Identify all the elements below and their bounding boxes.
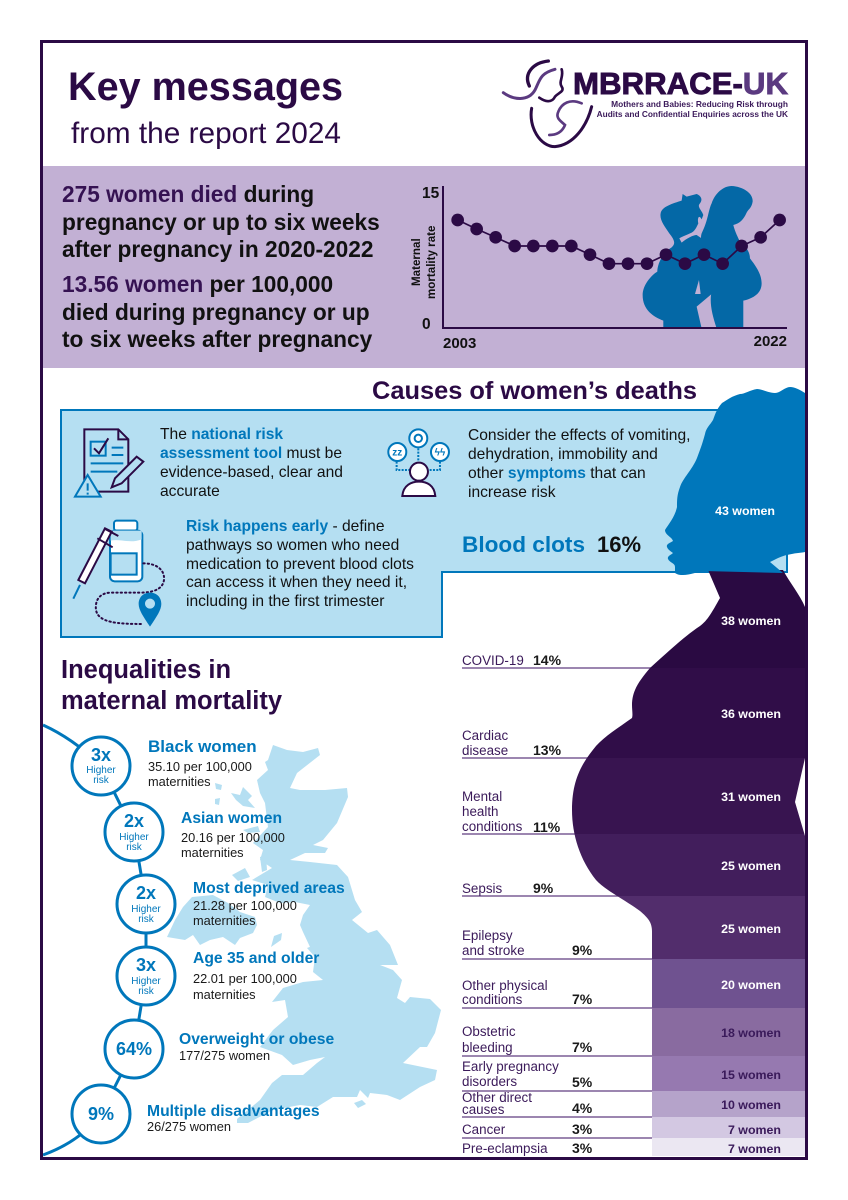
- text: national risk assessment tool: [160, 426, 343, 500]
- item: Black women: 35.10 per 100,000: [148, 759, 252, 774]
- connector: curved line through risk circles: [43, 725, 146, 1155]
- list: causes of death percentages: 9%: [572, 942, 593, 958]
- text: mortality rate: [62, 271, 373, 352]
- text: national risk assessment tool: accurate: [160, 483, 220, 500]
- text: consider the effects: increase risk: [468, 484, 556, 501]
- item: Age 35 and older: risk: [138, 986, 155, 997]
- text: risk happens early: [186, 518, 414, 610]
- line chart: maternal mortality rate: 0: [422, 316, 431, 333]
- head: blood clots segment: [665, 387, 805, 575]
- item: Overweight or obese: 64%: [116, 1039, 152, 1059]
- icon: logo mother and baby profile: [503, 61, 592, 147]
- item: Age 35 and older: Higher: [131, 976, 161, 987]
- chart: silhouette of pregnant woman divided by cause: 36 women: [721, 707, 781, 721]
- icon: person with symptoms: ϟϟ: [435, 448, 446, 459]
- icon: person with symptoms: [388, 429, 449, 496]
- item: Most deprived areas: 21.28 per 100,000: [193, 898, 297, 913]
- chart: silhouette of pregnant woman divided by cause: 7 women: [728, 1142, 781, 1156]
- list: causes of death percentages: health: [462, 804, 498, 819]
- item: Most deprived areas: Higher: [131, 904, 161, 915]
- list: causes of death percentages: COVID-19: [462, 653, 524, 668]
- list: causes of death percentages: 9%: [533, 880, 554, 896]
- list: causes of death percentages: 14%: [533, 652, 562, 668]
- figure lines: cause list rules: [462, 668, 660, 1138]
- list: causes of death percentages: Epilepsy: [462, 928, 513, 943]
- item: Asian women: Higher: [119, 832, 149, 843]
- text: blood clots percentage: [462, 532, 641, 557]
- list: causes of death percentages: 4%: [572, 1100, 593, 1116]
- text: women died: [62, 181, 380, 262]
- text: consider the effects: other symptoms that can: [468, 465, 646, 482]
- list: causes of death percentages: 3%: [572, 1140, 593, 1156]
- item: Asian women: [105, 803, 285, 861]
- panel: headline statistics band: [43, 166, 805, 368]
- text: consider the effects: [468, 427, 690, 501]
- item: Black women: Black women: [148, 737, 257, 756]
- text: national risk assessment tool: The national risk: [160, 426, 283, 443]
- chart: silhouette of pregnant woman divided by cause: [560, 387, 810, 1156]
- text: risk happens early: pathways so women who need: [186, 537, 399, 554]
- item: Age 35 and older: 3x: [136, 955, 156, 975]
- item: Asian women: maternities: [181, 845, 244, 860]
- chart: silhouette of pregnant woman divided by cause: 38 women: [721, 614, 781, 628]
- list: causes of death percentages: Other physical: [462, 978, 548, 993]
- item: Most deprived areas: risk: [138, 914, 155, 925]
- item: Overweight or obese: 177/275 women: [179, 1048, 270, 1063]
- icon: person with symptoms: zz: [392, 448, 402, 459]
- list: causes of death percentages: 13%: [533, 742, 562, 758]
- list: causes of death percentages: disorders: [462, 1074, 517, 1089]
- text: risk happens early: can access it when they need it,: [186, 574, 407, 591]
- panel: blood clots box: [61, 410, 787, 637]
- chart: silhouette of pregnant woman divided by cause: 7 women: [728, 1123, 781, 1137]
- heading: causes of women's deaths: Causes of women’s deaths: [372, 377, 697, 405]
- heading: inequalities in maternal mortality: Inequalities in: [61, 656, 231, 684]
- item: Age 35 and older: Age 35 and older: [193, 950, 319, 967]
- item: Age 35 and older: 22.01 per 100,000: [193, 971, 297, 986]
- heading: inequalities in maternal mortality: maternal mortality: [61, 687, 283, 715]
- list: causes of death percentages: Cancer: [462, 1122, 506, 1137]
- list: causes of death percentages: Early pregnancy: [462, 1059, 559, 1074]
- list: causes of death percentages: 5%: [572, 1074, 593, 1090]
- logo: MBRRACE-UK: [503, 61, 789, 147]
- list: causes of death percentages: Cardiac: [462, 728, 508, 743]
- list: causes of death percentages: conditions: [462, 819, 523, 834]
- list: causes of death percentages: bleeding: [462, 1040, 513, 1055]
- text: risk happens early: including in the first trimester: [186, 593, 384, 610]
- chart: silhouette of pregnant woman divided by cause: 31 women: [721, 790, 781, 804]
- logo: MBRRACE-UK: Audits and Confidential Enquiries across the UK: [597, 109, 788, 119]
- text: mortality rate: died during pregnancy or up: [62, 299, 370, 325]
- line chart: maternal mortality rate: mortality rate: [425, 225, 438, 299]
- item: Most deprived areas: Most deprived areas: [193, 880, 345, 897]
- chart: silhouette of pregnant woman divided by cause: 18 women: [721, 1026, 781, 1040]
- line chart: maternal mortality rate: 15: [422, 185, 440, 202]
- text: women died: after pregnancy in 2020-2022: [62, 236, 373, 262]
- item: Multiple disadvantages: [72, 1085, 320, 1143]
- chart: silhouette of pregnant woman divided by cause: 43 women: [715, 504, 775, 518]
- item: Multiple disadvantages: Multiple disadvantages: [147, 1103, 320, 1120]
- item: Black women: [72, 737, 257, 795]
- text: blood clots percentage: 16%: [597, 532, 641, 557]
- text: women died: 275 women died during: [62, 181, 314, 207]
- text: consider the effects: dehydration, immobility and: [468, 446, 658, 463]
- item: Most deprived areas: maternities: [193, 913, 256, 928]
- list: causes of death percentages: and stroke: [462, 943, 525, 958]
- text: mortality rate: to six weeks after pregnancy: [62, 326, 373, 352]
- chart: silhouette of pregnant woman divided by cause: 10 women: [721, 1098, 781, 1112]
- list: causes of death percentages: [462, 652, 593, 1156]
- list: causes of death percentages: Sepsis: [462, 881, 502, 896]
- list: causes of death percentages: Pre-eclampsia: [462, 1141, 548, 1156]
- item: Multiple disadvantages: 9%: [88, 1104, 114, 1124]
- list: causes of death percentages: 3%: [572, 1121, 593, 1137]
- icon: risk assessment document: [75, 429, 143, 497]
- icon: pregnant women silhouettes: [643, 186, 762, 328]
- list: causes of death percentages: Mental: [462, 789, 502, 804]
- line chart: maternal mortality rate: 2022: [754, 333, 787, 350]
- line chart: maternal mortality rate: Maternal: [410, 238, 423, 286]
- item: Black women: 3x: [91, 745, 111, 765]
- item: Asian women: 2x: [124, 811, 144, 831]
- item: Age 35 and older: maternities: [193, 987, 256, 1002]
- chart: silhouette of pregnant woman divided by cause: 25 women: [721, 922, 781, 936]
- list: causes of death percentages: causes: [462, 1102, 505, 1117]
- item: Black women: maternities: [148, 774, 211, 789]
- map: United Kingdom: [167, 745, 441, 1123]
- text: mortality rate: 13.56 women per 100,000: [62, 271, 333, 297]
- list: causes of death percentages: conditions: [462, 992, 523, 1007]
- list: causes of death percentages: 7%: [572, 1039, 593, 1055]
- text: blood clots percentage: Blood clots: [462, 532, 585, 557]
- item: Black women: Higher: [86, 765, 116, 776]
- chart: silhouette of pregnant woman divided by cause: 25 women: [721, 859, 781, 873]
- title: Key messages: [68, 65, 343, 109]
- list: causes of death percentages: 7%: [572, 991, 593, 1007]
- item: Multiple disadvantages: 26/275 women: [147, 1119, 231, 1134]
- item: Age 35 and older: [117, 947, 319, 1005]
- item: Black women: risk: [93, 775, 110, 786]
- text: risk happens early: Risk happens early - define: [186, 518, 385, 535]
- item: Asian women: risk: [126, 842, 143, 853]
- line chart: maternal mortality rate: 2003: [443, 335, 476, 352]
- text: risk happens early: medication to prevent blood clots: [186, 556, 414, 573]
- text: national risk assessment tool: evidence-based, clear and: [160, 464, 343, 481]
- logo: MBRRACE-UK: Mothers and Babies: Reducing Risk through: [611, 99, 788, 109]
- item: Asian women: Asian women: [181, 810, 282, 827]
- text: national risk assessment tool: assessment tool must be: [160, 445, 342, 462]
- item: Overweight or obese: [105, 1020, 334, 1078]
- item: Asian women: 20.16 per 100,000: [181, 830, 285, 845]
- item: Overweight or obese: Overweight or obese: [179, 1031, 334, 1048]
- list: causes of death percentages: 11%: [533, 819, 561, 835]
- text: women died: pregnancy or up to six weeks: [62, 209, 380, 235]
- list: causes of death percentages: Obstetric: [462, 1024, 516, 1039]
- line chart: maternal mortality rate: [410, 185, 787, 352]
- list: causes of death percentages: disease: [462, 743, 508, 758]
- logo: MBRRACE-UK: MBRRACE-UK: [573, 66, 789, 101]
- chart: silhouette of pregnant woman divided by cause: 15 women: [721, 1068, 781, 1082]
- item: Most deprived areas: 2x: [136, 883, 156, 903]
- title: [68, 65, 343, 150]
- item: Most deprived areas: [117, 875, 345, 933]
- list: causes of death percentages: Other direct: [462, 1090, 532, 1105]
- chart: silhouette of pregnant woman divided by cause: 20 women: [721, 978, 781, 992]
- text: consider the effects: Consider the effects of vomiting,: [468, 427, 690, 444]
- title: from the report 2024: [71, 117, 341, 150]
- heading: inequalities in maternal mortality: [61, 656, 283, 715]
- icon: syringe, medicine bottle and pathway: [73, 521, 164, 627]
